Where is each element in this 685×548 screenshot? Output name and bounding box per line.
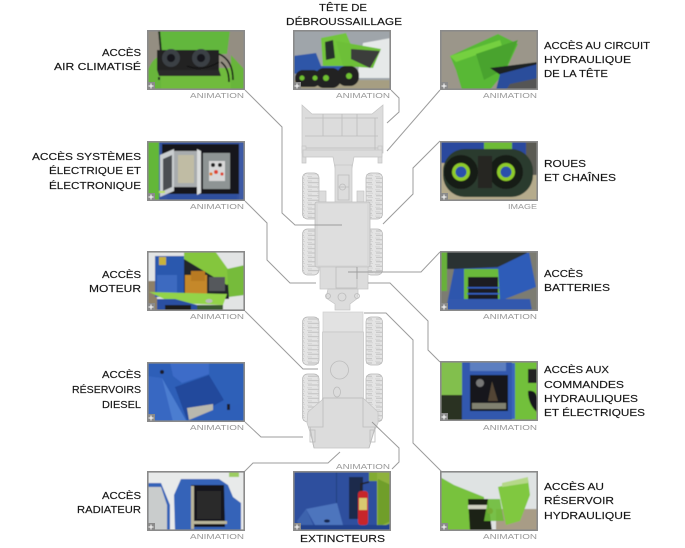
leader line: roues et chaînes	[383, 141, 440, 224]
panel: tête de débroussaillage	[286, 1, 402, 100]
panel: accès réservoirs diesel	[72, 362, 245, 432]
tag: animation: ANIMATION	[483, 312, 537, 321]
label: accès batteries: BATTERIES	[544, 282, 610, 294]
label: accès batteries	[544, 267, 610, 294]
label: accès systèmes	[32, 150, 142, 192]
photo: extincteurs	[293, 471, 391, 531]
label: accès systèmes: ÉLECTRIQUE ET	[49, 164, 142, 177]
articulation joint	[326, 289, 360, 310]
label: accès batteries: ACCÈS	[544, 267, 583, 280]
leader line: réservoirs diesel	[245, 422, 303, 437]
photo: batteries	[440, 251, 538, 311]
panel: accès air climatisé	[54, 30, 245, 100]
neck and front chassis	[315, 165, 370, 289]
leader line: circuit hydraulique	[387, 90, 440, 151]
label: tête de débroussaillage	[286, 1, 402, 28]
label: roues et chaînes: ROUES	[544, 158, 586, 170]
label: accès aux commandes: HYDRAULIQUES	[544, 393, 638, 405]
label: accès moteur	[89, 268, 141, 295]
label: accès radiateur: RADIATEUR	[77, 504, 141, 516]
label: accès au réservoir hydraulique	[544, 480, 631, 522]
photo: radiateur	[147, 471, 245, 531]
label: accès réservoirs diesel: DIESEL	[102, 399, 141, 411]
label: roues et chaînes	[544, 158, 616, 184]
label: extincteurs: EXTINCTEURS	[300, 533, 385, 545]
label: accès radiateur: ACCÈS	[102, 489, 141, 502]
label: accès au réservoir hydraulique: HYDRAULIQUE	[544, 510, 631, 522]
panel: accès systèmes électrique et électronique	[32, 141, 245, 211]
tag: animation: ANIMATION	[483, 423, 537, 432]
panel: accès radiateur	[77, 471, 245, 541]
tag: animation: ANIMATION	[483, 532, 537, 541]
label: tête de débroussaillage: TÊTE DE	[319, 1, 367, 14]
label: accès réservoirs diesel	[72, 368, 141, 411]
label: accès air climatisé: AIR CLIMATISÉ	[54, 60, 141, 73]
panel: accès au réservoir hydraulique	[440, 471, 631, 541]
label: accès air climatisé	[54, 46, 141, 73]
rear chassis	[307, 312, 378, 448]
leader line: tête de débroussaillage	[387, 90, 399, 123]
tag: animation: ANIMATION	[483, 91, 537, 100]
label: accès moteur: ACCÈS	[102, 268, 141, 281]
leader line: réservoir hydraulique	[364, 313, 442, 472]
label: accès radiateur	[77, 489, 141, 516]
photo: réservoirs diesel	[147, 362, 245, 422]
label: accès au circuit hydraulique	[544, 39, 651, 80]
label: accès au circuit hydraulique: HYDRAULIQUE	[544, 54, 631, 66]
label: tête de débroussaillage: DÉBROUSSAILLAGE	[286, 15, 402, 28]
label: accès systèmes: ÉLECTRONIQUE	[49, 179, 141, 192]
panel: accès aux commandes	[440, 361, 645, 432]
leader line: batteries	[348, 252, 440, 272]
label: accès au circuit hydraulique: ACCÈS AU CIRCUIT	[544, 39, 651, 52]
label: accès réservoirs diesel: ACCÈS	[102, 368, 141, 381]
leader line: radiateur	[244, 452, 340, 472]
tag: image: IMAGE	[508, 202, 537, 211]
photo: commandes hydrauliques	[440, 361, 538, 421]
panel: accès batteries	[440, 251, 610, 321]
leader line: systèmes électriques	[245, 201, 316, 283]
label: accès au réservoir hydraulique: RÉSERVOIR	[544, 494, 614, 507]
label: accès moteur: MOTEUR	[89, 283, 141, 295]
front wheels	[302, 173, 382, 275]
label: accès au circuit hydraulique: DE LA TÊTE	[544, 67, 608, 80]
tag: animation: ANIMATION	[190, 423, 244, 432]
vehicle top-view diagram	[302, 105, 383, 448]
label: accès systèmes: ACCÈS SYSTÈMES	[32, 150, 141, 163]
photo: air climatisé	[147, 30, 245, 90]
panel: roues et chaînes	[440, 141, 616, 211]
tag: animation: ANIMATION	[336, 462, 390, 471]
leader line: commandes	[368, 283, 440, 362]
label: accès aux commandes: COMMANDES	[544, 379, 624, 391]
label: accès aux commandes: ET ÉLECTRIQUES	[544, 406, 645, 419]
panel: accès au circuit hydraulique de la tête	[440, 30, 651, 100]
tag: animation: ANIMATION	[190, 312, 244, 321]
label: accès aux commandes: ACCÈS AUX	[544, 363, 609, 376]
photo: moteur	[147, 251, 245, 311]
front cutting head	[302, 105, 383, 168]
label: accès air climatisé: ACCÈS	[102, 46, 141, 59]
photo: roues et chaînes	[440, 141, 538, 201]
panel: accès moteur	[89, 251, 245, 321]
tag: animation: ANIMATION	[190, 91, 244, 100]
rear wheels	[302, 317, 382, 422]
leader line: air climatisé	[245, 90, 342, 225]
leader line: moteur	[245, 311, 318, 369]
photo: machine avec tête	[293, 30, 391, 90]
tag: animation: ANIMATION	[336, 91, 390, 100]
label: accès au réservoir hydraulique: ACCÈS AU	[544, 480, 604, 493]
panel: extincteurs	[293, 462, 391, 545]
leader line: extincteurs	[372, 422, 399, 469]
label: accès aux commandes	[544, 363, 645, 419]
label: roues et chaînes: ET CHAÎNES	[544, 171, 616, 184]
photo: réservoir hydraulique	[440, 471, 538, 531]
label: accès réservoirs diesel: RÉSERVOIRS	[72, 383, 141, 396]
photo: armoires électriques	[147, 141, 245, 201]
tag: animation: ANIMATION	[190, 202, 244, 211]
photo: circuit hydraulique	[440, 30, 538, 90]
tag: animation: ANIMATION	[190, 532, 244, 541]
